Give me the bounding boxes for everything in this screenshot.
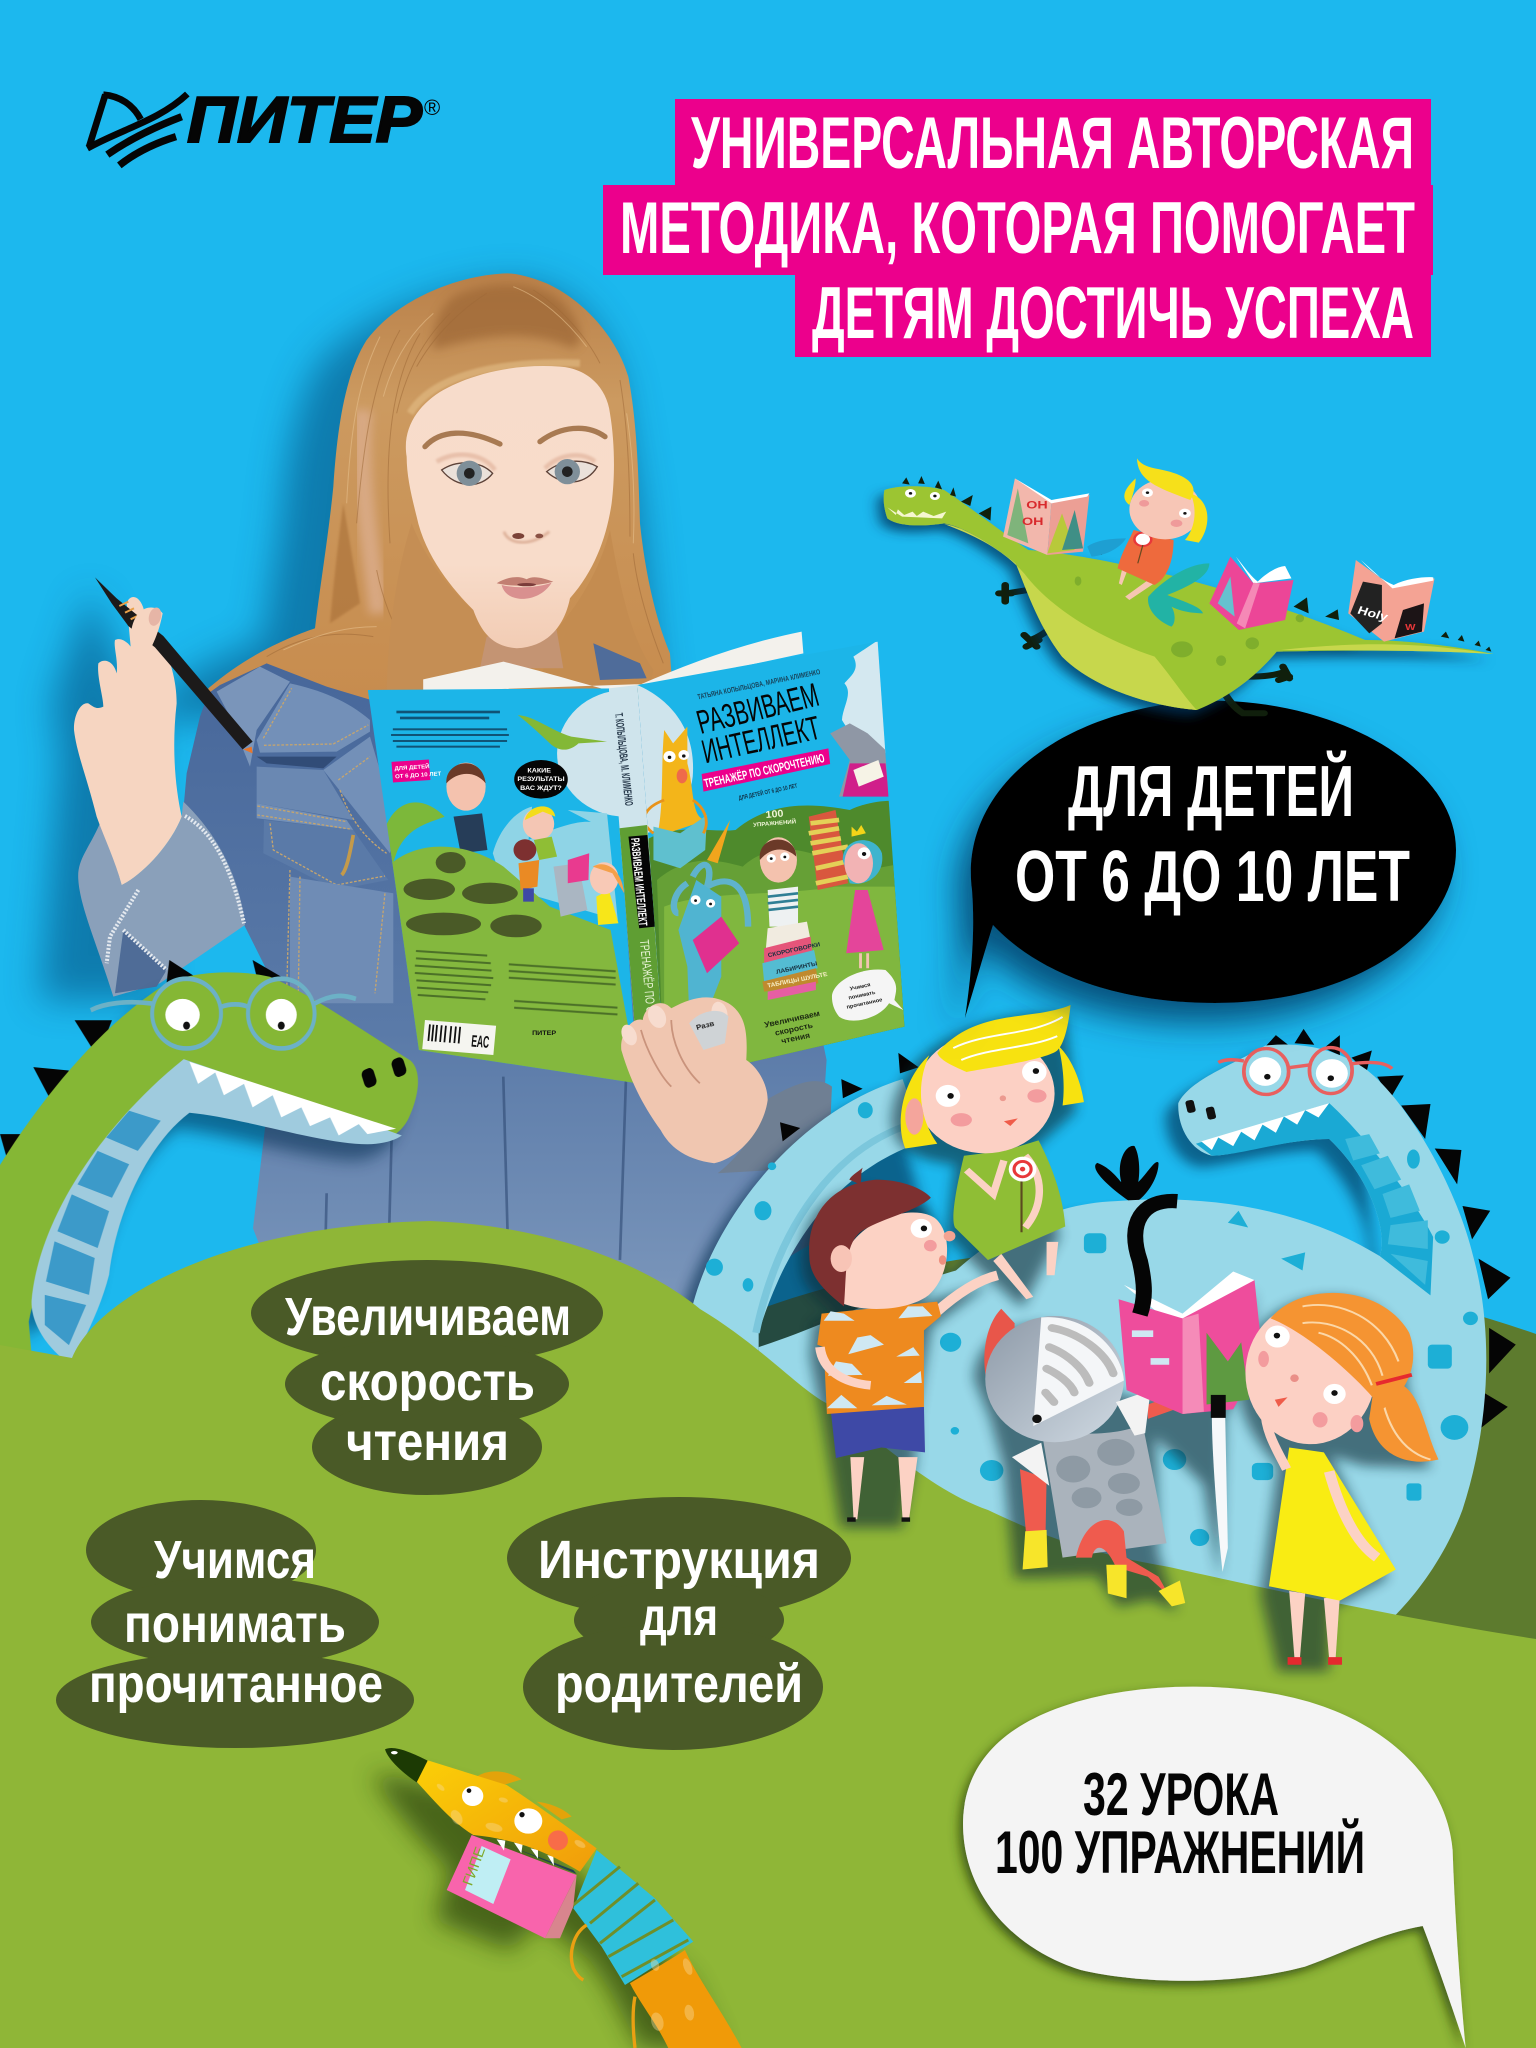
jacket lower panel <box>290 877 393 1003</box>
label blob <box>56 1500 414 1748</box>
blue dino nostrils <box>1185 1100 1196 1113</box>
child: ginger girl <box>1245 1293 1438 1665</box>
jacket body <box>183 663 827 1333</box>
sleeve dark fold <box>115 930 167 993</box>
dragon legs <box>999 585 1289 713</box>
white bubble text: 100 УПРАЖНЕНИЙ <box>995 1819 1365 1886</box>
front cover bunny <box>674 865 748 1013</box>
front cover title line 2: ИНТЕЛЛЕКТ <box>698 710 824 771</box>
flying green dragon with girl and books <box>884 458 1493 713</box>
back cover boy <box>446 763 487 853</box>
headline background <box>603 99 1433 357</box>
pen <box>95 577 253 753</box>
dino nostrils <box>360 1067 378 1089</box>
front cover princess <box>809 810 884 968</box>
hair strands <box>267 290 663 670</box>
dragon body <box>884 486 1493 710</box>
fox scarf <box>573 1850 693 1985</box>
label text: чтения <box>346 1412 509 1472</box>
label text: прочитанное <box>89 1654 383 1714</box>
knight sword <box>1211 1395 1228 1572</box>
dino shadow <box>22 988 405 1338</box>
book on dragon: Holy <box>1348 560 1435 642</box>
book held by girl <box>350 632 921 1173</box>
jacket chest panel <box>257 767 353 820</box>
back cover kids <box>514 806 624 925</box>
front cover boy on books <box>760 837 828 1000</box>
back cover mini green dino <box>386 802 444 864</box>
fox eyes <box>462 1786 483 1806</box>
fox second paw <box>633 1997 635 2048</box>
label text: Увеличиваем <box>285 1287 571 1347</box>
label blob <box>507 1497 851 1750</box>
fox nose <box>385 1748 428 1782</box>
mini sticker under finger <box>689 1011 728 1050</box>
child: boy <box>809 1168 998 1522</box>
hair mass <box>208 273 673 700</box>
fox teeth <box>493 1840 577 1874</box>
blue dino neck underside <box>1196 1103 1433 1295</box>
children group <box>801 1005 1438 1671</box>
back cover bubble text: РЕЗУЛЬТАТЫ <box>517 776 565 783</box>
fox paw rope <box>571 1925 587 1980</box>
blue dino spines <box>780 1029 1516 1431</box>
back cover mini dragon <box>518 715 607 750</box>
front cover white bubble: прочитанное <box>846 997 883 1011</box>
fox body <box>630 1950 742 2048</box>
back cover mini bubble <box>514 760 568 799</box>
jacket collar <box>257 683 370 753</box>
fox pink book: ГИПЕ <box>460 1845 489 1888</box>
white bubble shape <box>963 1687 1466 2048</box>
icon: logo wing <box>87 94 187 165</box>
headline text <box>620 103 1415 354</box>
blue dino arc inner shade <box>756 1127 903 1333</box>
blue dino spots <box>706 1102 1478 1546</box>
front cover reading speed label <box>764 1012 820 1044</box>
book on dragon: Holy: W <box>1405 623 1416 633</box>
dino teeth <box>189 1062 396 1135</box>
book on dragon: Holy: Holy <box>1356 603 1391 624</box>
boy shirt clouds <box>824 1306 932 1408</box>
girl shadow on sky <box>40 282 660 1000</box>
face shape <box>406 366 614 648</box>
front cover reading speed label: скорость <box>774 1021 814 1038</box>
back cover light circle <box>557 692 619 816</box>
front cover light circle <box>637 685 693 833</box>
front cover book stack labels <box>767 941 828 990</box>
fox shadow <box>372 1775 720 2048</box>
blue dino neck segments <box>1345 1134 1428 1285</box>
dragon belly <box>944 524 1197 710</box>
olive label: comprehension <box>56 1500 414 1748</box>
dino blue neck <box>32 1059 402 1365</box>
left hand thumb <box>132 608 163 650</box>
front cover white bubble <box>832 970 903 1021</box>
label text: для <box>640 1587 718 1647</box>
teal leaves <box>1087 538 1209 627</box>
sleeve grey cuff <box>718 1081 832 1173</box>
black bubble shape <box>965 701 1456 1018</box>
jacket shoulder yoke <box>257 803 353 830</box>
fox pink book <box>447 1835 577 1938</box>
eyebrows <box>425 433 500 447</box>
jacket placket stitching <box>287 870 385 993</box>
left hand palm <box>74 597 182 885</box>
front cover book stack labels: ТАБЛИЦЫ ШУЛЬТЕ <box>767 971 828 990</box>
dino eyes <box>165 999 200 1031</box>
white bubble text <box>995 1761 1365 1886</box>
blue dino eyes <box>1249 1057 1281 1086</box>
black dino tail <box>1135 1201 1177 1315</box>
girl riding dragon <box>1118 458 1207 600</box>
spine authors: Т. КОПЫЛЬЦОВА, М. КЛИМЕНКО <box>612 712 635 807</box>
front cover age line: ДЛЯ ДЕТЕЙ ОТ 6 ДО 10 ЛЕТ <box>738 782 798 802</box>
spine <box>609 685 666 1085</box>
back cover text blocks <box>391 711 509 748</box>
back cover bubble text <box>517 768 565 792</box>
front cover white bubble: понимать <box>848 990 877 1001</box>
blue dino arc tail <box>687 1079 924 1361</box>
barcode <box>422 1020 496 1055</box>
mouth <box>497 577 553 599</box>
photo: girl <box>74 273 827 1333</box>
blue dino glasses <box>1218 1048 1392 1094</box>
hair front right lock <box>540 530 653 700</box>
label text: скорость <box>320 1352 535 1412</box>
nose <box>504 532 549 542</box>
front cover cloud <box>842 640 889 753</box>
spine subtitle: ТРЕНАЖЁР ПО С <box>637 939 658 1013</box>
hair crown shade <box>433 285 580 350</box>
hair front left lock <box>387 523 517 700</box>
jacket <box>74 577 827 1333</box>
child: blonde girl with lollipop <box>901 1005 1084 1299</box>
jacket pocket flap <box>263 820 388 890</box>
logo wordmark: ПИТЕР <box>187 83 423 156</box>
black speech bubble <box>965 701 1456 1018</box>
back cover age tag: ОТ 6 ДО 10 ЛЕТ <box>395 771 442 780</box>
book on dragon: Oh Oh Oh: ОН <box>1022 514 1043 528</box>
label text: Инструкция <box>538 1530 820 1590</box>
label text: родителей <box>555 1654 803 1714</box>
headline panel <box>603 99 1433 357</box>
dragon spots <box>1075 576 1304 666</box>
logo registered mark: ® <box>424 95 440 120</box>
book pages <box>423 632 803 692</box>
dragon spines <box>902 476 1491 652</box>
back cover mini blue dino <box>493 807 618 920</box>
front cover book stack labels: ЛАБИРИНТЫ <box>775 960 818 976</box>
front cover wolf <box>830 723 893 797</box>
label text <box>285 1287 571 1472</box>
jacket back collar <box>217 667 290 767</box>
front green hill <box>0 1221 1536 2048</box>
front cover white bubble: Учимся <box>849 982 871 992</box>
right hand <box>619 997 768 1163</box>
denim through hair <box>593 643 647 680</box>
knight book <box>1119 1271 1263 1414</box>
jacket lapel <box>323 737 397 853</box>
hair side streak <box>362 410 378 613</box>
front cover <box>638 642 904 1062</box>
front cover pink banner: ТРЕНАЖЁР ПО СКОРОЧТЕНИЮ <box>702 750 826 790</box>
hairline highlight <box>410 363 580 413</box>
logo: Piter <box>87 83 440 165</box>
fox with book <box>385 1748 742 2048</box>
front cover title line 1: РАЗВИВАЕМ <box>693 677 823 741</box>
background dark hill right <box>680 1251 1536 1700</box>
book on dragon: Oh Oh Oh: ОН <box>1026 498 1048 511</box>
back cover bubble text: ВАС ЖДУТ? <box>520 785 562 792</box>
hair dark lock <box>330 503 360 623</box>
fox ears <box>477 1771 522 1785</box>
child: knight <box>984 1309 1225 1606</box>
front cover fox <box>644 727 730 868</box>
blue dino shadow <box>674 1056 1380 1440</box>
fox head <box>417 1760 597 1872</box>
label text <box>538 1530 820 1714</box>
back cover bubble text: КАКИЕ <box>527 768 551 775</box>
sleeve frayed hem <box>107 816 244 970</box>
front cover hills <box>648 800 904 1062</box>
label text: понимать <box>124 1594 346 1654</box>
right hand: Разв <box>695 1019 716 1032</box>
eyelid shade <box>437 455 595 470</box>
white speech bubble <box>963 1687 1466 2048</box>
front cover title authors: ТАТЬЯНА КОПЫЛЬЦОВА, МАРИНА КЛИМЕНКО <box>697 667 821 701</box>
label blob <box>251 1260 603 1495</box>
blue dino body <box>759 1044 1486 1620</box>
back cover <box>368 688 634 1083</box>
front cover: УПРАЖНЕНИЙ <box>753 817 796 829</box>
hair <box>208 273 673 700</box>
back cover olive labels <box>404 852 542 937</box>
front cover reading speed label: чтения <box>780 1031 811 1046</box>
front cover book stack labels: СКОРОГОВОРКИ <box>767 941 822 959</box>
blue dinosaur <box>674 1029 1516 1620</box>
olive label: parents guide <box>507 1497 851 1750</box>
front cover reading speed label: Увеличиваем <box>763 1009 821 1029</box>
book on dragon: Oh Oh Oh <box>1003 478 1089 555</box>
fox spots <box>436 1783 695 2032</box>
neck <box>480 630 563 668</box>
left green dinosaur <box>0 960 418 1422</box>
face <box>387 366 653 700</box>
back cover age tag: ДЛЯ ДЕТЕЙ <box>394 762 430 772</box>
barcode: ЕАС <box>471 1031 490 1052</box>
dino neck segments <box>45 1111 161 1345</box>
dragon tail highlight <box>1281 644 1493 654</box>
jacket sleeve <box>78 802 245 997</box>
front cover exercise count: 100 <box>765 809 784 821</box>
white bubble text: 32 УРОКА <box>1083 1761 1279 1828</box>
right eye <box>547 459 597 484</box>
jacket lower seams <box>323 1060 627 1333</box>
black bubble text <box>1015 750 1410 917</box>
dino green body and head <box>0 972 418 1422</box>
dino glasses <box>91 979 356 1048</box>
back cover age tag <box>391 759 442 782</box>
front cover pink banner <box>702 748 830 792</box>
book on dragon: pink <box>1209 557 1294 630</box>
left eye <box>442 461 493 486</box>
black bubble text: ДЛЯ ДЕТЕЙ <box>1068 750 1354 832</box>
dino spines <box>0 960 281 1174</box>
label text <box>89 1530 383 1714</box>
dragon face <box>905 489 916 498</box>
back cover hill <box>386 847 639 1087</box>
label text: Учимся <box>154 1530 316 1590</box>
fox cheek <box>548 1830 568 1850</box>
spine title: РАЗВИВАЕМ ИНТЕЛЛЕКТ <box>628 837 650 927</box>
olive label: reading speed <box>251 1260 603 1495</box>
back publisher: ПИТЕР <box>532 1030 557 1037</box>
blue dino teeth <box>1201 1103 1329 1150</box>
children shadows <box>801 1014 1430 1671</box>
